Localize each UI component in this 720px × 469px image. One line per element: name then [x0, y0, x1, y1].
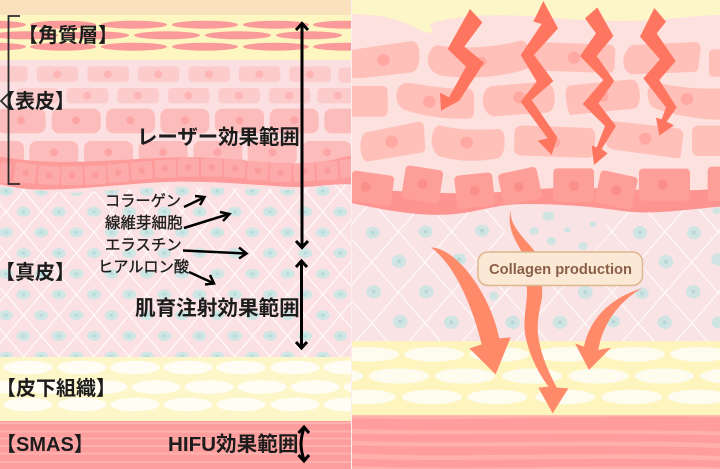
subcutaneous fat layer: [0, 357, 351, 421]
dermis magnified: [350, 203, 720, 343]
arrow: collagen centre: [510, 210, 568, 413]
arrow: 線維芽細胞 pointer: [184, 212, 230, 228]
callout: Collagen production: Collagen production: [489, 261, 632, 278]
callout: Collagen production: [478, 252, 642, 286]
arrow: HIFU range: [298, 427, 309, 461]
arrow: laser range: [296, 24, 308, 248]
heading: 角質層: 【角質層】: [18, 23, 118, 47]
label: エラスチン: エラスチン: [105, 237, 182, 254]
label: 肌育注射効果範囲: 肌育注射効果範囲: [135, 297, 300, 320]
SMAS muscle layer: [0, 421, 351, 469]
epidermis layer: [0, 60, 373, 193]
label: ヒアルロン酸: ヒアルロン酸: [98, 259, 189, 276]
label: HIFU効果範囲: HIFU効果範囲: [168, 433, 298, 456]
stratum corneum layer: [0, 15, 379, 60]
basement membrane band: [350, 187, 720, 215]
panel: left skin cross-section: [0, 0, 351, 469]
basal cells: [348, 165, 720, 210]
icon: lightning arrow 4: [640, 8, 677, 136]
label: 線維芽細胞: 線維芽細胞: [105, 214, 183, 232]
surface background: [352, 0, 720, 34]
separator: [351, 0, 353, 469]
epidermis magnified: [352, 14, 720, 194]
label: コラーゲン: コラーゲン: [105, 193, 181, 210]
arrow: ヒアルロン酸 pointer: [189, 272, 214, 284]
icon: lightning arrow 1: [440, 9, 484, 111]
arrow: エラスチン pointer: [183, 248, 246, 258]
arrow: collagen left: [431, 247, 511, 374]
label: レーザー効果範囲: レーザー効果範囲: [137, 126, 300, 149]
panel: right magnified skin: [352, 0, 720, 469]
icon: lightning arrow 3: [580, 7, 616, 165]
background: skin surface: [0, 0, 351, 15]
fat layer magnified: [352, 341, 720, 416]
keratinocyte cells: [347, 41, 720, 162]
arrow: injection range: [296, 261, 307, 348]
muscle layer magnified: [350, 415, 720, 469]
dermis layer: [0, 180, 351, 358]
bracket: epidermis and stratum corneum: [1, 16, 20, 184]
icon: lightning arrow 2: [521, 1, 558, 155]
arrow: collagen right: [575, 288, 642, 370]
arrow: コラーゲン pointer: [184, 196, 204, 207]
